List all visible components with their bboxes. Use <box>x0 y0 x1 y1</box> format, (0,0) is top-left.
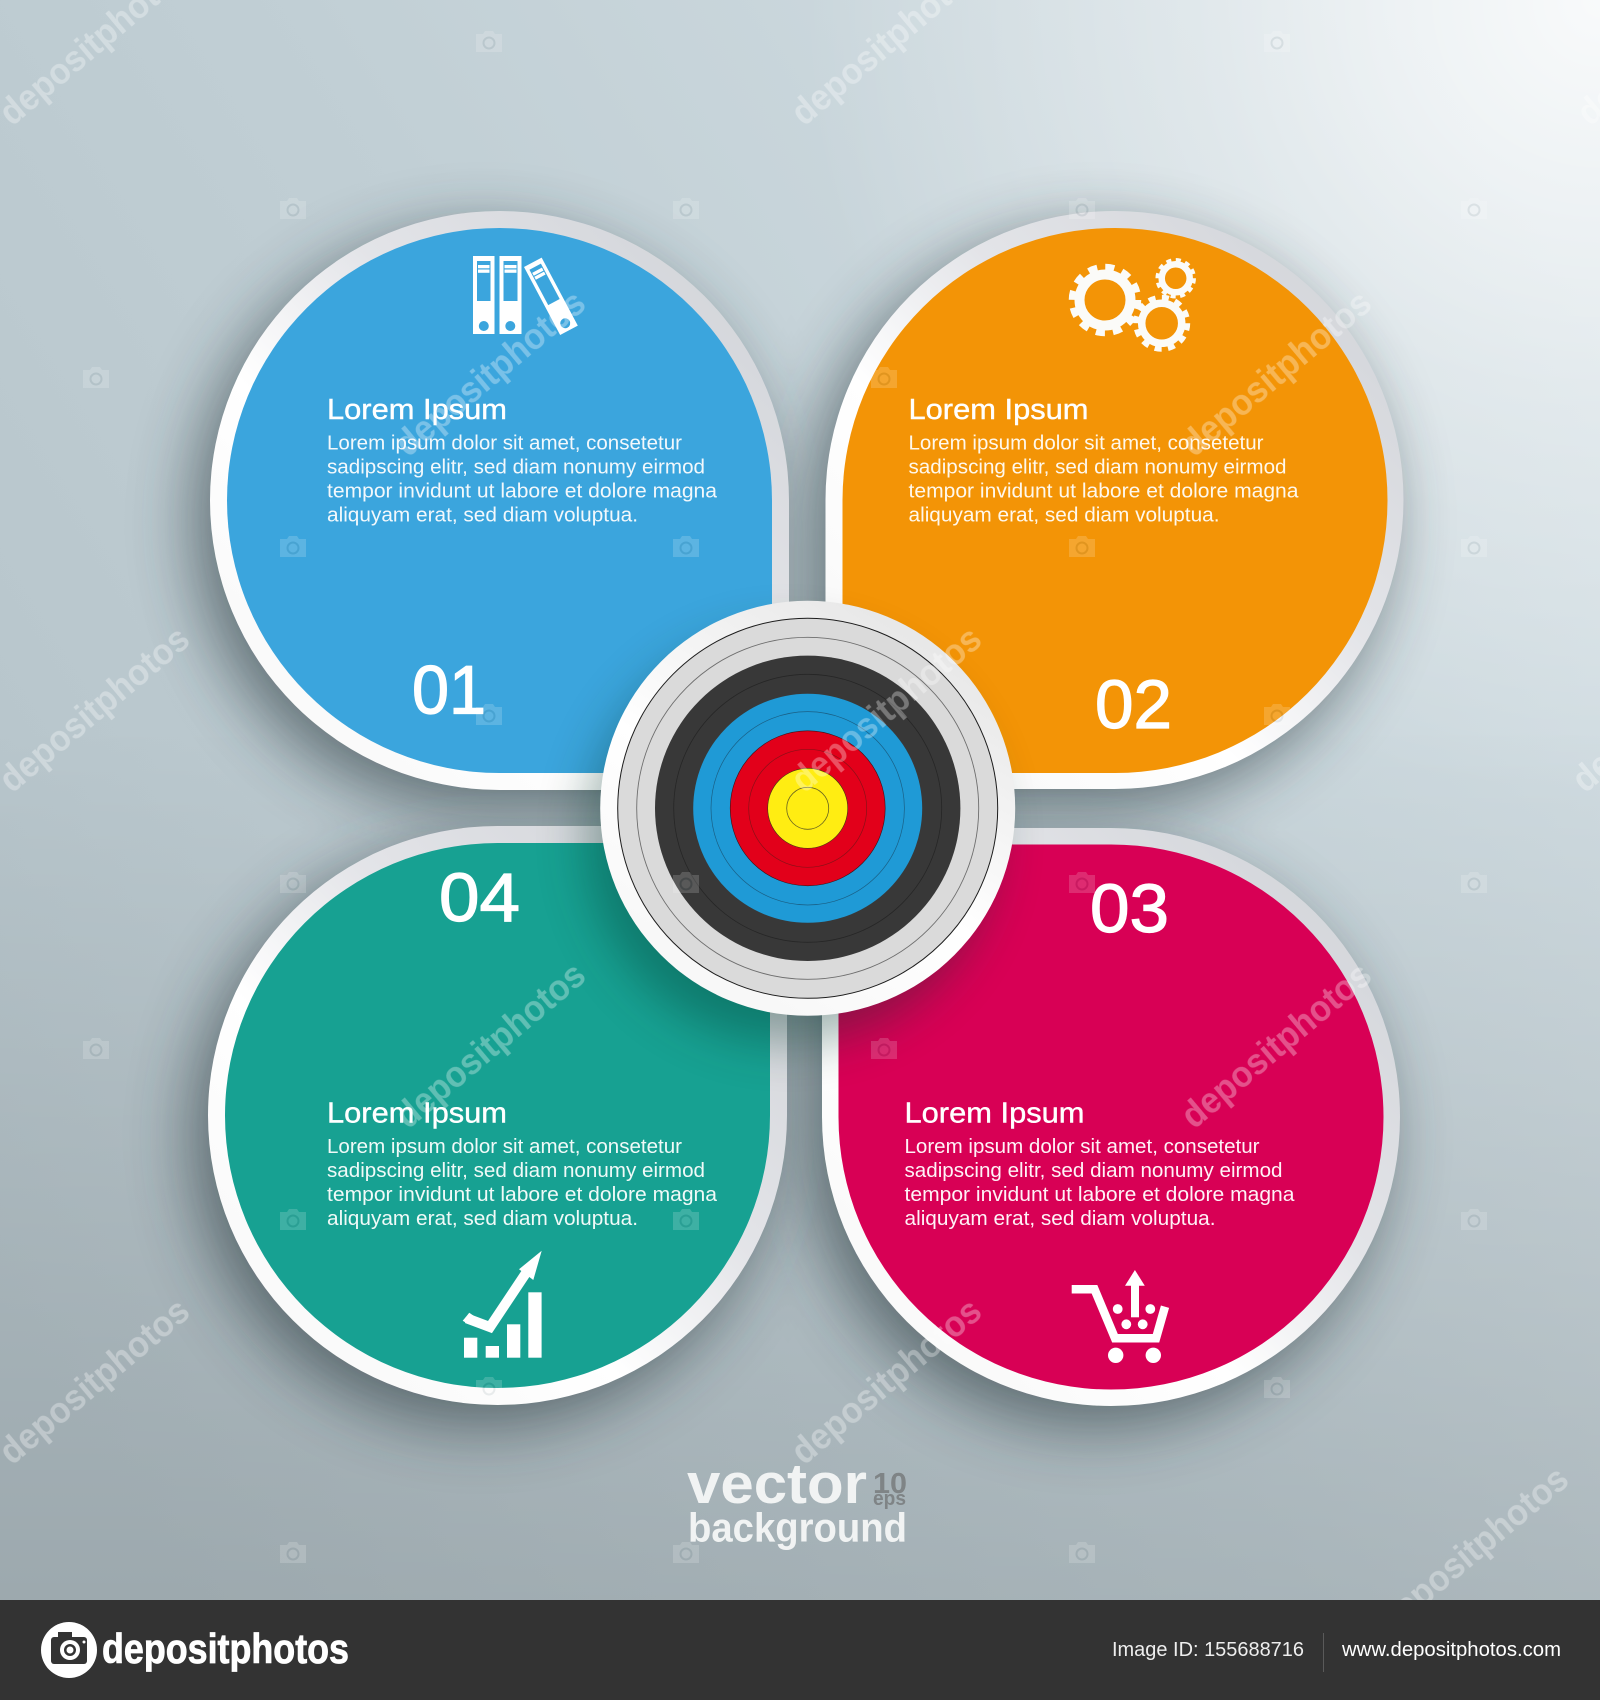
text block: panel 01: sadipscing elitr, sed diam nonumy eirmod <box>327 456 705 478</box>
text block: panel 02: Lorem ipsum dolor sit amet, consetetur <box>908 432 1264 454</box>
watermark layer: depositphotos <box>387 954 593 1136</box>
logo: wordmark: depositphotos <box>102 1625 349 1672</box>
text block: panel 04 <box>327 1098 718 1230</box>
text block: panel 02: aliquyam erat, sed diam voluptua. <box>908 504 1220 526</box>
panel 04: green <box>208 826 787 1405</box>
text block: panel 02: sadipscing elitr, sed diam nonumy eirmod <box>908 456 1286 478</box>
text block: panel 03: sadipscing elitr, sed diam nonumy eirmod <box>904 1160 1282 1182</box>
text block: panel 03: Lorem Ipsum <box>904 1098 1084 1130</box>
text block: panel 02 <box>908 394 1299 526</box>
website: www.depositphotos.com <box>1341 1639 1561 1661</box>
badge: vector background 10 eps: background <box>688 1505 907 1551</box>
target <box>600 601 1015 1016</box>
logo: camera mark <box>41 1622 97 1678</box>
icon: growth chart <box>463 1251 542 1358</box>
badge: vector background 10 eps: eps <box>873 1488 906 1510</box>
number 01: 01 <box>412 652 486 728</box>
image id: Image ID: 155688716 <box>1112 1639 1304 1661</box>
badge: vector background 10 eps: 10 <box>873 1468 907 1500</box>
text block: panel 01 <box>327 394 718 526</box>
text block: panel 02: Lorem Ipsum <box>908 394 1088 426</box>
number 02: 02 <box>1095 666 1172 743</box>
panel 02: orange <box>826 211 1404 789</box>
watermark layer: depositphotos <box>1173 954 1379 1136</box>
icon: binders <box>473 256 578 335</box>
text block: panel 01: aliquyam erat, sed diam voluptua. <box>327 504 638 526</box>
watermark layer: depositphotos <box>387 282 593 464</box>
badge: vector background 10 eps: vector <box>687 1452 867 1516</box>
panel shadows <box>192 231 1388 1426</box>
text block: panel 04: sadipscing elitr, sed diam nonumy eirmod <box>327 1160 705 1182</box>
text block: panel 01: tempor invidunt ut labore et dolore magna <box>327 480 718 502</box>
text block: panel 02: tempor invidunt ut labore et dolore magna <box>908 480 1299 502</box>
text block: panel 04: tempor invidunt ut labore et dolore magna <box>327 1184 718 1206</box>
number 04: 04 <box>439 859 520 936</box>
watermark layer: depositphotos <box>783 1290 989 1472</box>
panel 01: blue <box>210 211 789 790</box>
text block: panel 04: aliquyam erat, sed diam voluptua. <box>327 1208 638 1230</box>
text block: panel 03: tempor invidunt ut labore et dolore magna <box>904 1184 1295 1206</box>
watermark layer: depositphotos <box>1370 1458 1576 1640</box>
target shadow <box>585 633 995 1043</box>
number 03: 03 <box>1090 870 1169 947</box>
watermark layer: depositphotos <box>783 618 989 800</box>
icon: gears <box>1072 260 1194 349</box>
icon: shopping cart <box>1072 1270 1165 1363</box>
footer bar <box>0 1600 1600 1700</box>
text block: panel 03: Lorem ipsum dolor sit amet, consetetur <box>904 1136 1260 1158</box>
text block: panel 03: aliquyam erat, sed diam voluptua. <box>904 1208 1216 1230</box>
panel 03: pink <box>822 828 1400 1406</box>
text block: panel 03 <box>904 1098 1295 1230</box>
watermark layer: depositphotos <box>1173 282 1379 464</box>
text block: panel 01: Lorem ipsum dolor sit amet, consetetur <box>327 432 682 454</box>
text block: panel 01: Lorem Ipsum <box>327 394 507 426</box>
badge: vector background 10 eps <box>687 1452 907 1551</box>
text block: panel 04: Lorem Ipsum <box>327 1098 507 1130</box>
text block: panel 04: Lorem ipsum dolor sit amet, consetetur <box>327 1136 682 1158</box>
